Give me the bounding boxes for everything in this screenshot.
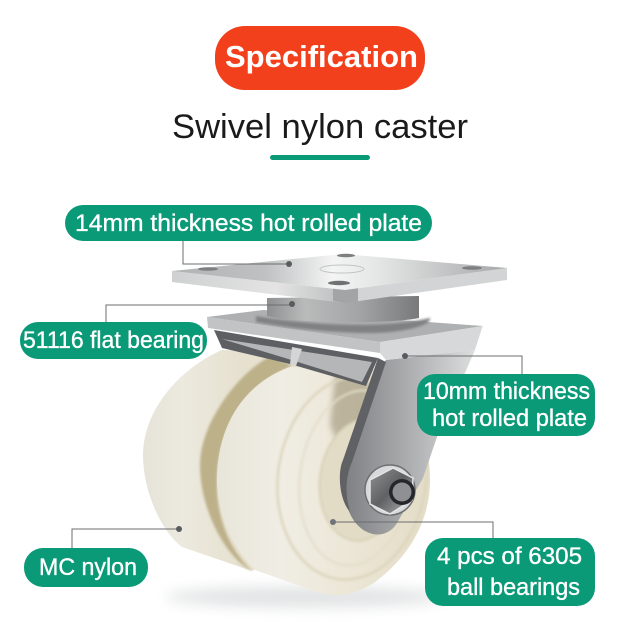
label: 10mm plate bbox=[417, 374, 595, 436]
label: MC nylon: MC nylon bbox=[39, 554, 137, 581]
label: 10mm plate: 10mm thickness bbox=[423, 378, 590, 405]
subtitle: Swivel nylon caster bbox=[172, 108, 468, 146]
weld bead bbox=[256, 316, 430, 333]
wheel hub rings bbox=[265, 367, 439, 589]
subtitle underline bbox=[270, 155, 370, 160]
label: ball bearings: 4 pcs of 6305 bbox=[437, 543, 582, 570]
leader line: side plate bbox=[402, 353, 522, 375]
leader line: top plate bbox=[183, 240, 292, 267]
floor shadow bbox=[165, 587, 445, 607]
side weld bbox=[399, 347, 472, 356]
bearing cylinder bbox=[267, 296, 419, 322]
leader line: nylon bbox=[72, 526, 182, 549]
label: ball bearings bbox=[425, 538, 595, 606]
axle nut and bolt bbox=[365, 465, 415, 515]
leader line: flat bearing bbox=[106, 301, 295, 323]
title pill bbox=[215, 26, 425, 90]
wheel gap shadow bbox=[200, 355, 292, 571]
mounting holes bbox=[198, 267, 218, 271]
label: ball bearings: ball bearings bbox=[447, 574, 580, 601]
fork shadow on wheel bbox=[330, 373, 372, 470]
label: 51116 bearing: 51116 flat bearing bbox=[23, 327, 204, 354]
fork inner bridge bbox=[214, 330, 378, 386]
top mounting plate bbox=[172, 254, 507, 303]
back wheel bbox=[143, 350, 300, 571]
product photo: swivel caster bbox=[143, 254, 507, 607]
label: 14mm plate bbox=[65, 205, 432, 241]
label: 14mm plate: 14mm thickness hot rolled plate bbox=[75, 210, 422, 237]
label: MC nylon bbox=[24, 548, 148, 587]
title pill: Specification bbox=[225, 39, 418, 74]
front wheel bbox=[217, 367, 439, 595]
fork top plate bbox=[207, 310, 483, 360]
label: 10mm plate: hot rolled plate bbox=[432, 405, 587, 432]
fork side plate bbox=[340, 347, 475, 535]
leader line: ball bearings bbox=[330, 519, 493, 539]
